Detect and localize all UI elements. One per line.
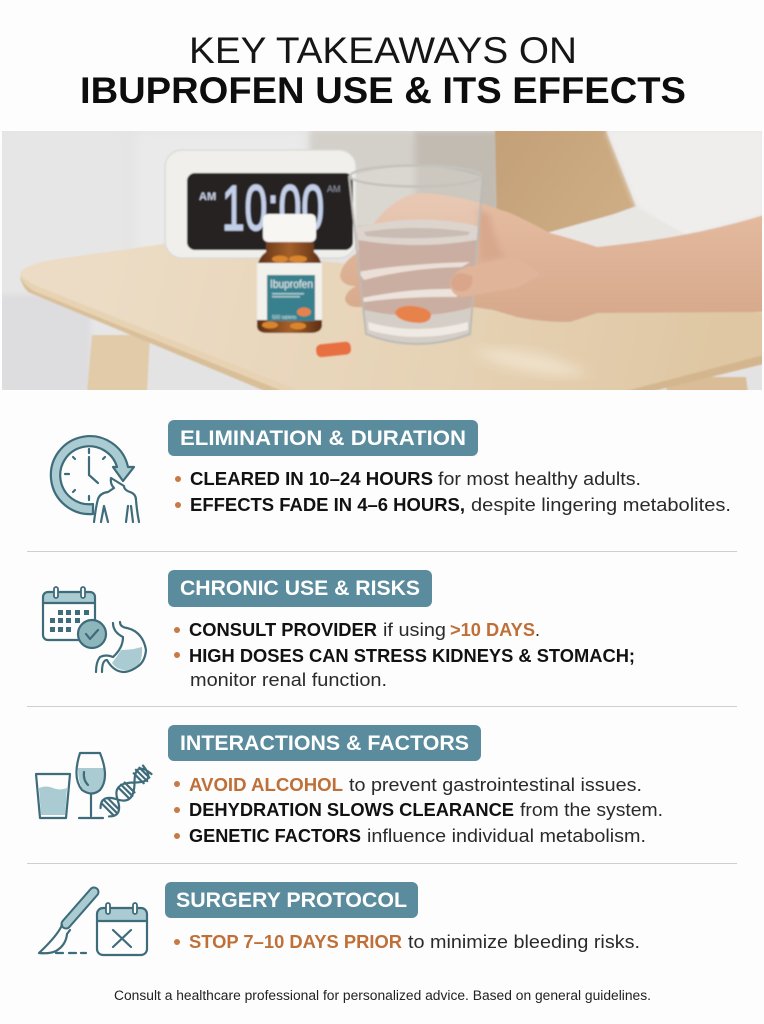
title [80,30,686,111]
text: elimination bullets: despite lingering metabolites. [471,495,731,515]
section: elimination and duration [51,420,731,522]
heading: surgery protocol [165,882,418,918]
text: interactions bullets: from the system. [520,800,663,820]
title: IBUPROFEN USE & ITS EFFECTS [80,70,686,111]
section: interactions and factors [36,725,663,846]
icon: water glass, wine glass and DNA [36,753,154,819]
text: chronic use bullets: . [535,620,540,640]
alarm clock: AM [199,191,216,203]
table side [20,276,282,390]
table legs [87,335,150,392]
text: interactions bullets: AVOID ALCOHOL [189,775,343,795]
section: surgery protocol [39,882,640,955]
alarm clock: 10:00 [222,172,324,244]
text: interactions bullets: GENETIC FACTORS [189,826,361,846]
icon: clock with body [51,436,139,522]
text: interactions bullets: influence individual metabolism. [367,826,646,846]
icon: calendar and stomach [43,587,146,672]
icon: scalpel and calendar [39,892,147,955]
photo background [0,130,764,392]
text: chronic use bullets: if using [383,620,446,640]
text: interactions bullets: to prevent gastrointestinal issues. [349,775,642,795]
heading: elimination and duration: ELIMINATION & DURATION [180,427,466,450]
heading: elimination and duration [168,420,478,456]
hand and arm behind glass [340,193,764,322]
text: interactions bullets: DEHYDRATION SLOWS CLEARANCE [189,800,514,820]
text: chronic use bullets [174,620,635,690]
photo: ibuprofen bottle, clock and glass of water on a bedside table [0,130,764,392]
text: elimination bullets: CLEARED IN 10–24 HOURS [190,469,433,489]
section: chronic use and risks [43,570,635,690]
pill in glass [395,306,431,323]
water glass [349,166,483,344]
text: surgery bullet: to minimize bleeding risks. [408,932,640,952]
heading: chronic use and risks: CHRONIC USE & RISKS [180,577,420,600]
text: chronic use bullets: >10 DAYS [450,620,535,640]
text: chronic use bullets: HIGH DOSES CAN STRESS KIDNEYS & STOMACH; [189,646,635,666]
ibuprofen bottle: 500 tablets [272,315,297,321]
ibuprofen bottle [257,214,322,333]
ibuprofen bottle: Ibuprofen [270,277,313,291]
footer note: Consult a healthcare professional for personalized advice. Based on general guidelines. [114,988,651,1003]
thumb in front of glass [450,264,478,297]
text: surgery bullet: STOP 7–10 DAYS PRIOR [189,932,402,952]
text: elimination bullets [175,469,731,515]
alarm clock [165,150,356,258]
text: chronic use bullets: CONSULT PROVIDER [189,620,377,640]
text: interactions bullets [174,775,663,846]
table top [20,243,764,392]
pill on table [315,341,352,358]
heading: chronic use and risks [168,570,432,607]
heading: interactions and factors: INTERACTIONS & FACTORS [180,732,469,755]
heading: surgery protocol: SURGERY PROTOCOL [176,889,407,912]
text: elimination bullets: for most healthy adults. [438,469,641,489]
title: KEY TAKEAWAYS ON [189,30,577,71]
alarm clock: AM [327,184,340,194]
heading: interactions and factors [168,725,481,761]
text: surgery bullet [174,932,640,952]
text: chronic use bullets: monitor renal function. [190,670,387,690]
text: elimination bullets: EFFECTS FADE IN 4–6 HOURS, [190,495,465,515]
